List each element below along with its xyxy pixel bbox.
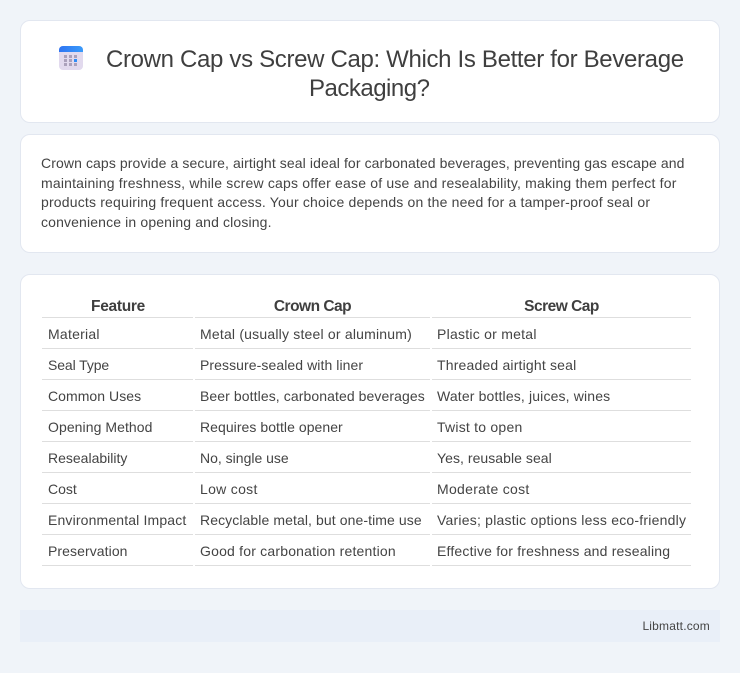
- comparison table: Varies; plastic options less eco-friendly: [437, 512, 686, 528]
- title: [106, 46, 684, 102]
- comparison table: Twist to open: [437, 419, 522, 435]
- comparison table: Yes, reusable seal: [437, 450, 552, 466]
- comparison table: Low cost: [200, 481, 258, 497]
- comparison table: Metal (usually steel or aluminum): [200, 326, 412, 342]
- comparison table: Screw Cap: [524, 298, 599, 315]
- comparison table: Feature: [91, 298, 145, 315]
- comparison table: Resealability: [48, 450, 127, 466]
- comparison table: Environmental Impact: [48, 512, 186, 528]
- comparison table: Crown Cap: [274, 298, 351, 315]
- comparison table: Requires bottle opener: [200, 419, 343, 435]
- comparison table: [42, 298, 691, 566]
- title: Crown Cap vs Screw Cap: Which Is Better for Beverage: [106, 46, 684, 73]
- intro text: [41, 155, 684, 230]
- comparison table: Threaded airtight seal: [437, 357, 576, 373]
- comparison table: Plastic or metal: [437, 326, 537, 342]
- comparison table: Pressure-sealed with liner: [200, 357, 363, 373]
- title: Packaging?: [309, 75, 429, 102]
- comparison table: No, single use: [200, 450, 289, 466]
- intro text: convenience in opening and closing.: [41, 214, 272, 230]
- comparison table: Water bottles, juices, wines: [437, 388, 610, 404]
- intro panel: [20, 134, 720, 253]
- comparison table: Moderate cost: [437, 481, 530, 497]
- comparison table: Common Uses: [48, 388, 141, 404]
- footer text: Libmatt.com: [642, 619, 710, 633]
- comparison table: Material: [48, 326, 100, 342]
- header panel: [20, 20, 720, 123]
- intro text: maintaining freshness, while screw caps offer ease of use and resealability, making them perfect for: [41, 175, 677, 191]
- icon: calendar: [59, 46, 83, 70]
- intro text: Crown caps provide a secure, airtight seal ideal for carbonated beverages, preventing gas escape and: [41, 155, 684, 171]
- footer bar: [20, 610, 720, 642]
- intro text: products requiring frequent access. Your choice depends on the need for a tamper-proof seal or: [41, 194, 650, 210]
- comparison table: Effective for freshness and resealing: [437, 543, 670, 559]
- comparison table: Seal Type: [48, 357, 109, 373]
- comparison table: Preservation: [48, 543, 128, 559]
- table panel: [20, 274, 720, 589]
- comparison table: Good for carbonation retention: [200, 543, 396, 559]
- comparison table: Recyclable metal, but one-time use: [200, 512, 422, 528]
- comparison table: Beer bottles, carbonated beverages: [200, 388, 425, 404]
- comparison table: Cost: [48, 481, 77, 497]
- comparison table: Opening Method: [48, 419, 152, 435]
